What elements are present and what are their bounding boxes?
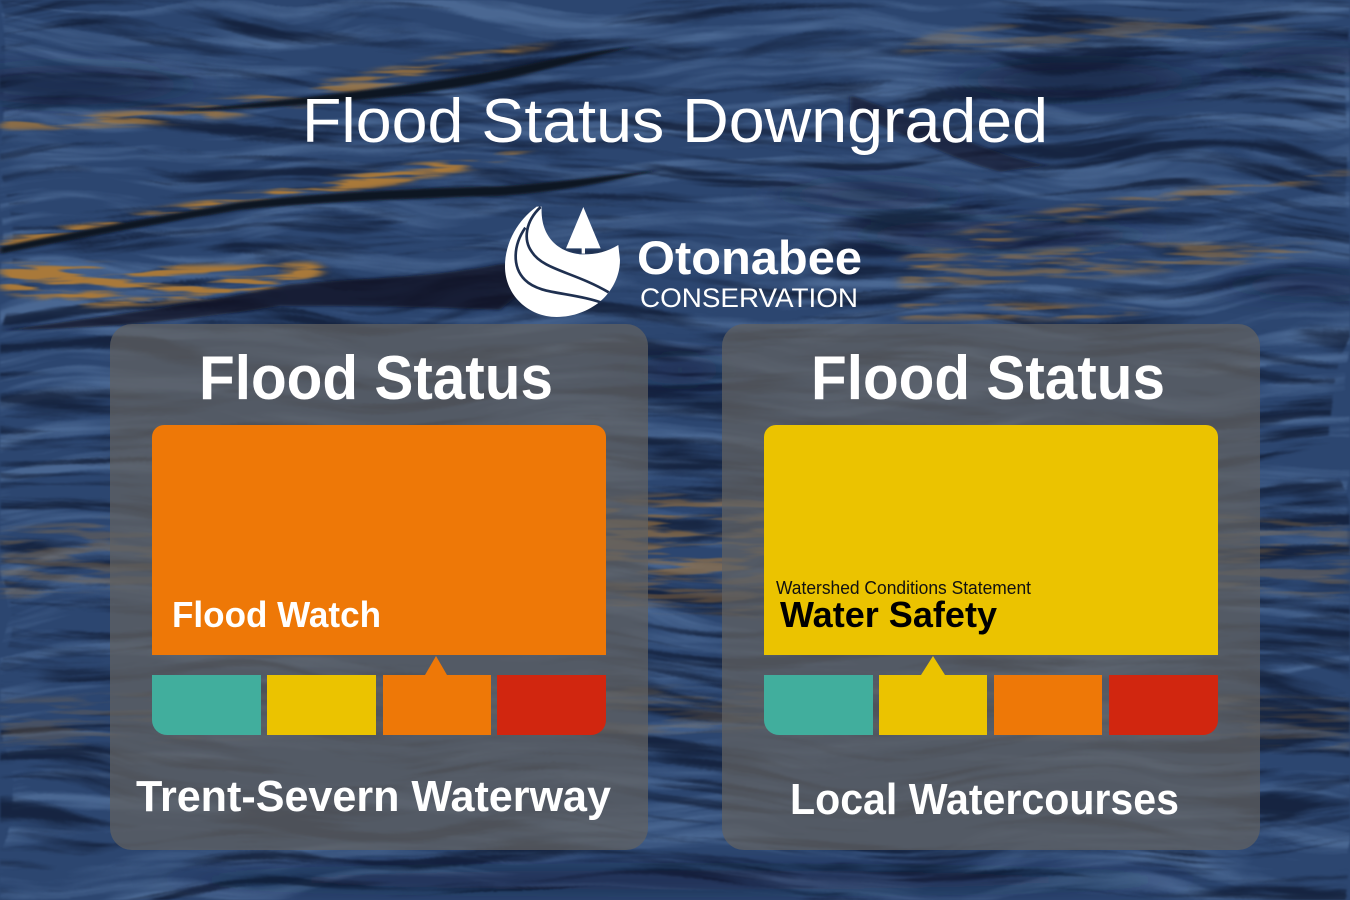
logo wordmark: Otonabee — [637, 231, 862, 284]
logo subtitle: CONSERVATION — [640, 283, 858, 313]
heading: Flood Status: Flood Status — [811, 344, 1165, 413]
panel: Trent-Severn Waterway — [110, 324, 648, 850]
status scale: four levels, yellow selected — [764, 656, 1218, 735]
status box: Water Safety: Watershed Conditions Statement — [776, 578, 1031, 598]
status box: Water Safety — [764, 425, 1218, 655]
logo: Otonabee Conservation — [505, 207, 862, 317]
heading: Flood Status: Flood Status — [199, 344, 553, 413]
label: Local Watercourses: Local Watercourses — [790, 775, 1179, 824]
label: Trent-Severn Waterway: Trent-Severn Waterway — [136, 772, 612, 821]
status box: Flood Watch: Flood Watch — [172, 594, 381, 635]
icon: logo mark with tree and river — [505, 207, 620, 317]
status box: Flood Watch — [152, 425, 606, 655]
title: Flood Status Downgraded — [302, 87, 1048, 156]
status scale: four levels, orange selected — [152, 656, 606, 735]
status box: Water Safety: Water Safety — [780, 594, 997, 635]
panel: Local Watercourses — [722, 324, 1260, 850]
